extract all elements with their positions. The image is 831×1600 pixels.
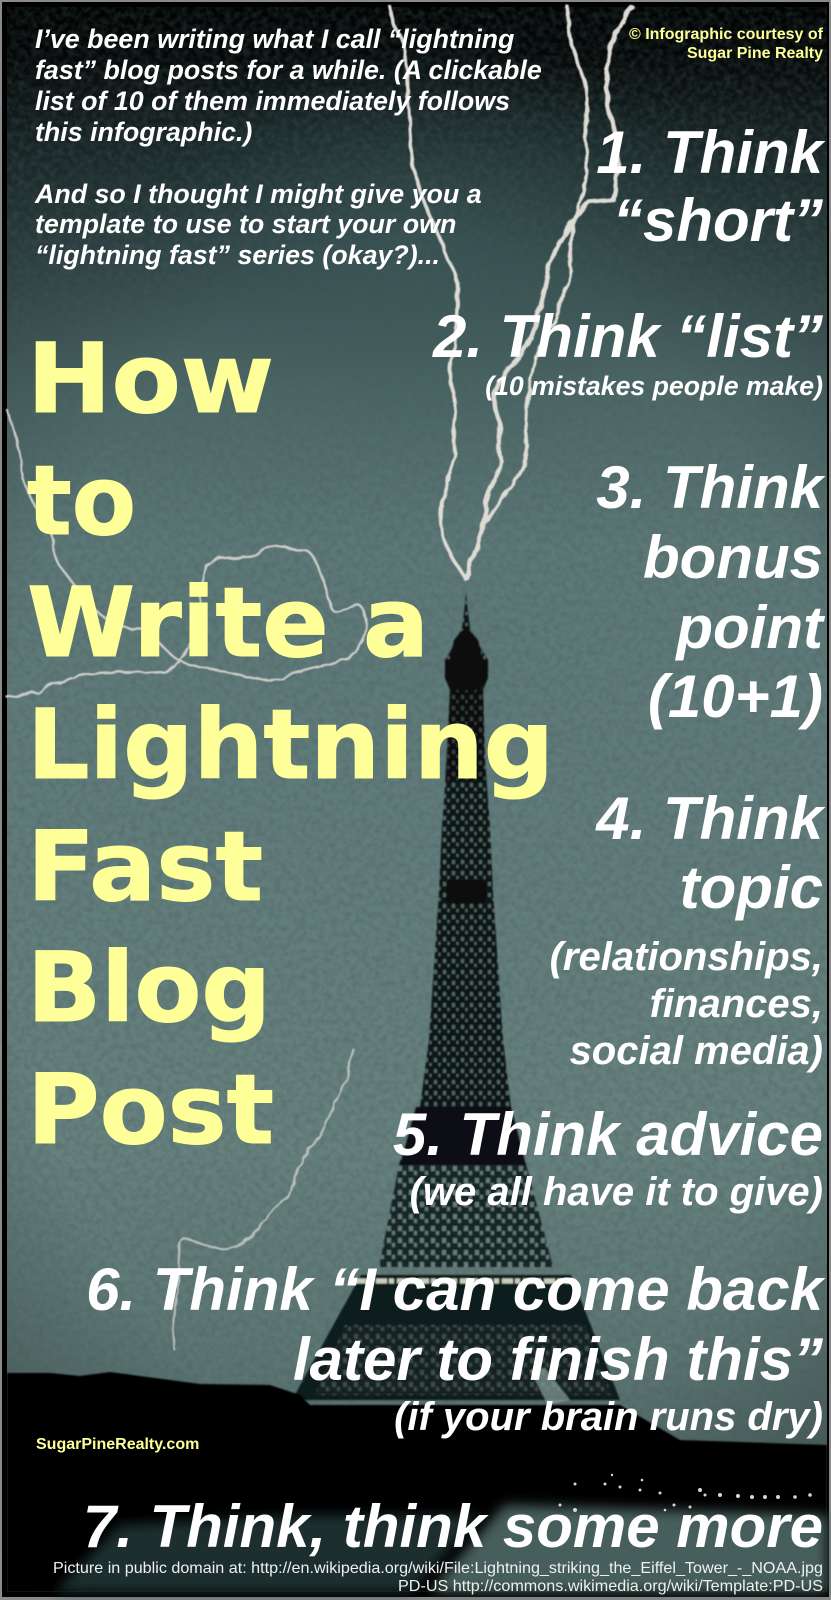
main title: Lightning [27,689,554,801]
city lights [558,1474,812,1512]
website link: SugarPineRealty.com [36,1436,199,1453]
tip 3 [596,454,826,730]
tip 3: (10+1) [648,663,823,730]
tip 4: 4. Think [595,785,826,852]
river and embankment [430,1505,827,1592]
tip 7: 7. Think, think some more [83,1493,823,1560]
tower lower section [379,1160,553,1267]
tip 1 [596,119,826,254]
tower second dark band [446,880,486,904]
tip 1: 1. Think [596,119,826,186]
tip 4: (relationships, [550,935,823,979]
tip 6 [86,1256,826,1439]
lightning bolts striking the tower [390,7,632,578]
image credits: Picture in public domain at: http://en.wikipedia.org/wiki/File:Lightning_striking_the_Eiffel_Tower_-_NOAA.jpg [53,1560,823,1577]
main title: Write a [27,567,429,679]
tip 4 [550,785,826,1073]
intro paragraph: fast” blog posts for a while. (A clickable [35,55,542,85]
intro paragraph: this infographic.) [35,117,252,147]
tip 5 [393,1101,823,1214]
tower upper shadow [445,690,485,780]
courtesy credit: © Infographic courtesy of [629,26,824,43]
courtesy credit: Sugar Pine Realty [687,45,823,62]
tip 2 [432,303,823,401]
lightning branches on the left [7,410,367,1350]
intro paragraph [34,24,542,270]
night city silhouette and lights [7,1372,827,1592]
courtesy credit [629,26,824,62]
main title: Post [27,1054,274,1166]
tower top platform [445,626,488,690]
intro paragraph: I’ve been writing what I call “lightning [35,24,514,54]
tip 2: 2. Think “list” [432,303,823,370]
intro paragraph: “lightning fast” series (okay?)... [35,240,440,270]
tip 4: finances, [650,982,823,1026]
tip 6: 6. Think “I can come back [86,1256,826,1323]
tip 4: social media) [570,1029,823,1073]
tip 3: point [674,594,826,661]
main title: Blog [27,932,271,1044]
image credits [53,1560,823,1595]
tip 6: later to finish this” [293,1326,823,1393]
tip 6: (if your brain runs dry) [394,1395,823,1439]
Eiffel Tower [292,593,620,1405]
intro paragraph: template to use to start your own [35,209,456,239]
tip 5: 5. Think advice [393,1101,823,1168]
tip 1: “short” [613,187,823,254]
tip 3: 3. Think [596,454,826,521]
image credits: PD-US http://commons.wikimedia.org/wiki/Template:PD-US [398,1578,823,1595]
second platform with lights [292,1275,620,1400]
main title: How [27,323,274,435]
tower upper section [420,593,511,1107]
tip 4: topic [680,854,823,921]
first platform [400,1107,526,1165]
main title [27,323,554,1166]
tip 2: (10 mistakes people make) [485,371,823,401]
intro paragraph: And so I thought I might give you a [34,179,482,209]
main title: to [27,445,136,557]
tip 5: (we all have it to give) [410,1170,823,1214]
tip 3: bonus [643,524,823,591]
intro paragraph: list of 10 of them immediately follows [35,86,510,116]
main title: Fast [27,811,263,923]
